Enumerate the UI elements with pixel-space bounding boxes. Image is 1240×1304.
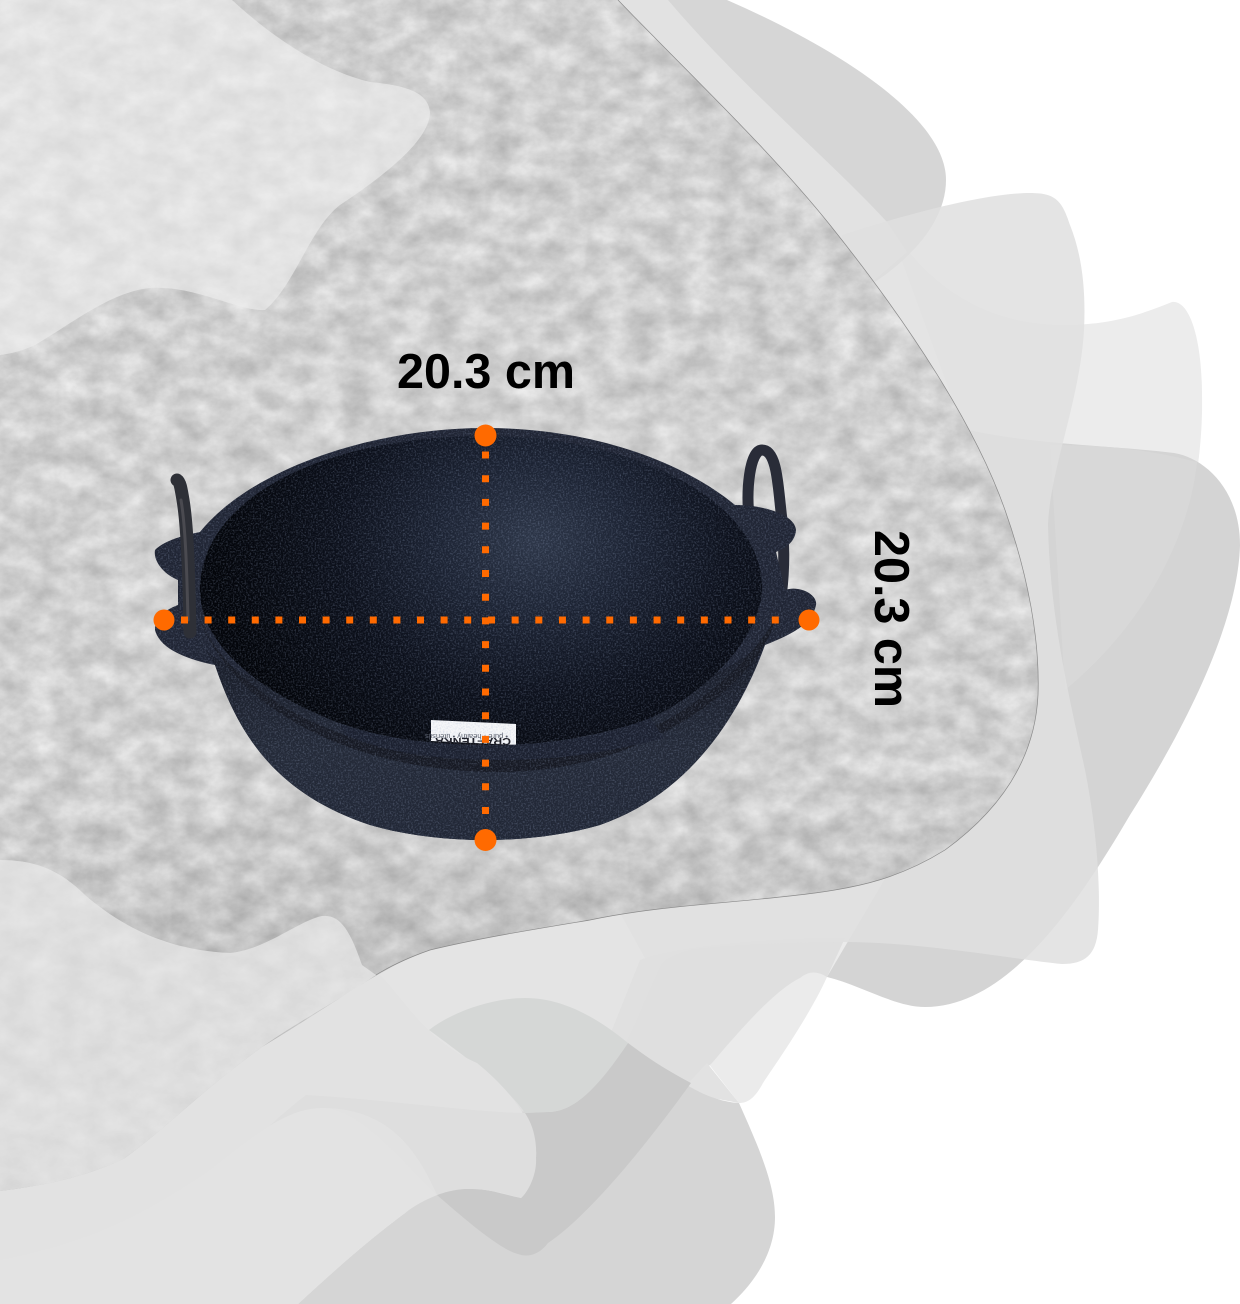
dimension: horizontal dotted line	[154, 610, 820, 630]
petal: top dark	[660, 0, 946, 282]
label: width: 20.3 cm	[397, 345, 575, 399]
dots vertical	[482, 452, 489, 814]
end cap top	[474, 424, 496, 446]
concrete edge line	[376, 0, 1038, 975]
petal: faint overlap inside right petal	[1050, 445, 1197, 690]
petal: far right dark	[700, 428, 1240, 1007]
kadai pan	[150, 425, 820, 845]
end cap right	[798, 610, 820, 630]
grain texture	[150, 425, 820, 845]
dots left	[181, 616, 472, 624]
label card	[431, 720, 516, 745]
fold: lower left inner petal	[160, 1095, 536, 1225]
label: height: 20.3 cm	[864, 530, 918, 708]
fold: small light triangle	[680, 1063, 739, 1103]
bowl interior	[200, 436, 762, 745]
left handle highlight	[181, 500, 188, 620]
end cap left	[154, 610, 174, 630]
overlay: top-left translucent petal	[0, 0, 430, 355]
right handle ring back	[748, 450, 784, 603]
dimension: vertical dotted line	[474, 424, 496, 851]
band: mid lower light	[600, 938, 845, 1100]
rim shadow	[200, 620, 775, 772]
left handle ring	[177, 480, 190, 632]
pan silhouette	[155, 428, 816, 840]
fold: lower left sliver	[0, 1108, 437, 1304]
petal: bottom-left base	[0, 975, 536, 1304]
petal peak under band	[429, 998, 628, 1113]
petal: upper right pale	[887, 220, 1202, 690]
label brand: CRAFTENKA	[435, 735, 511, 746]
label tagline: • pure • healthy • utensils	[425, 732, 508, 741]
pan outer body	[205, 640, 765, 840]
front rim	[340, 718, 664, 760]
band: top pale along concrete edge	[610, 0, 907, 282]
petal: main soft band around concrete	[0, 193, 1099, 1262]
end cap bottom	[474, 829, 496, 851]
panel: concrete background	[0, 0, 1060, 1200]
overlay: bottom-left translucent petal	[0, 860, 376, 1191]
petal: bottom large dark	[298, 1043, 775, 1304]
brand label	[425, 720, 516, 746]
tip: palest lower fold	[620, 877, 886, 1103]
dark overlap	[437, 1043, 691, 1256]
dots right	[488, 616, 780, 624]
